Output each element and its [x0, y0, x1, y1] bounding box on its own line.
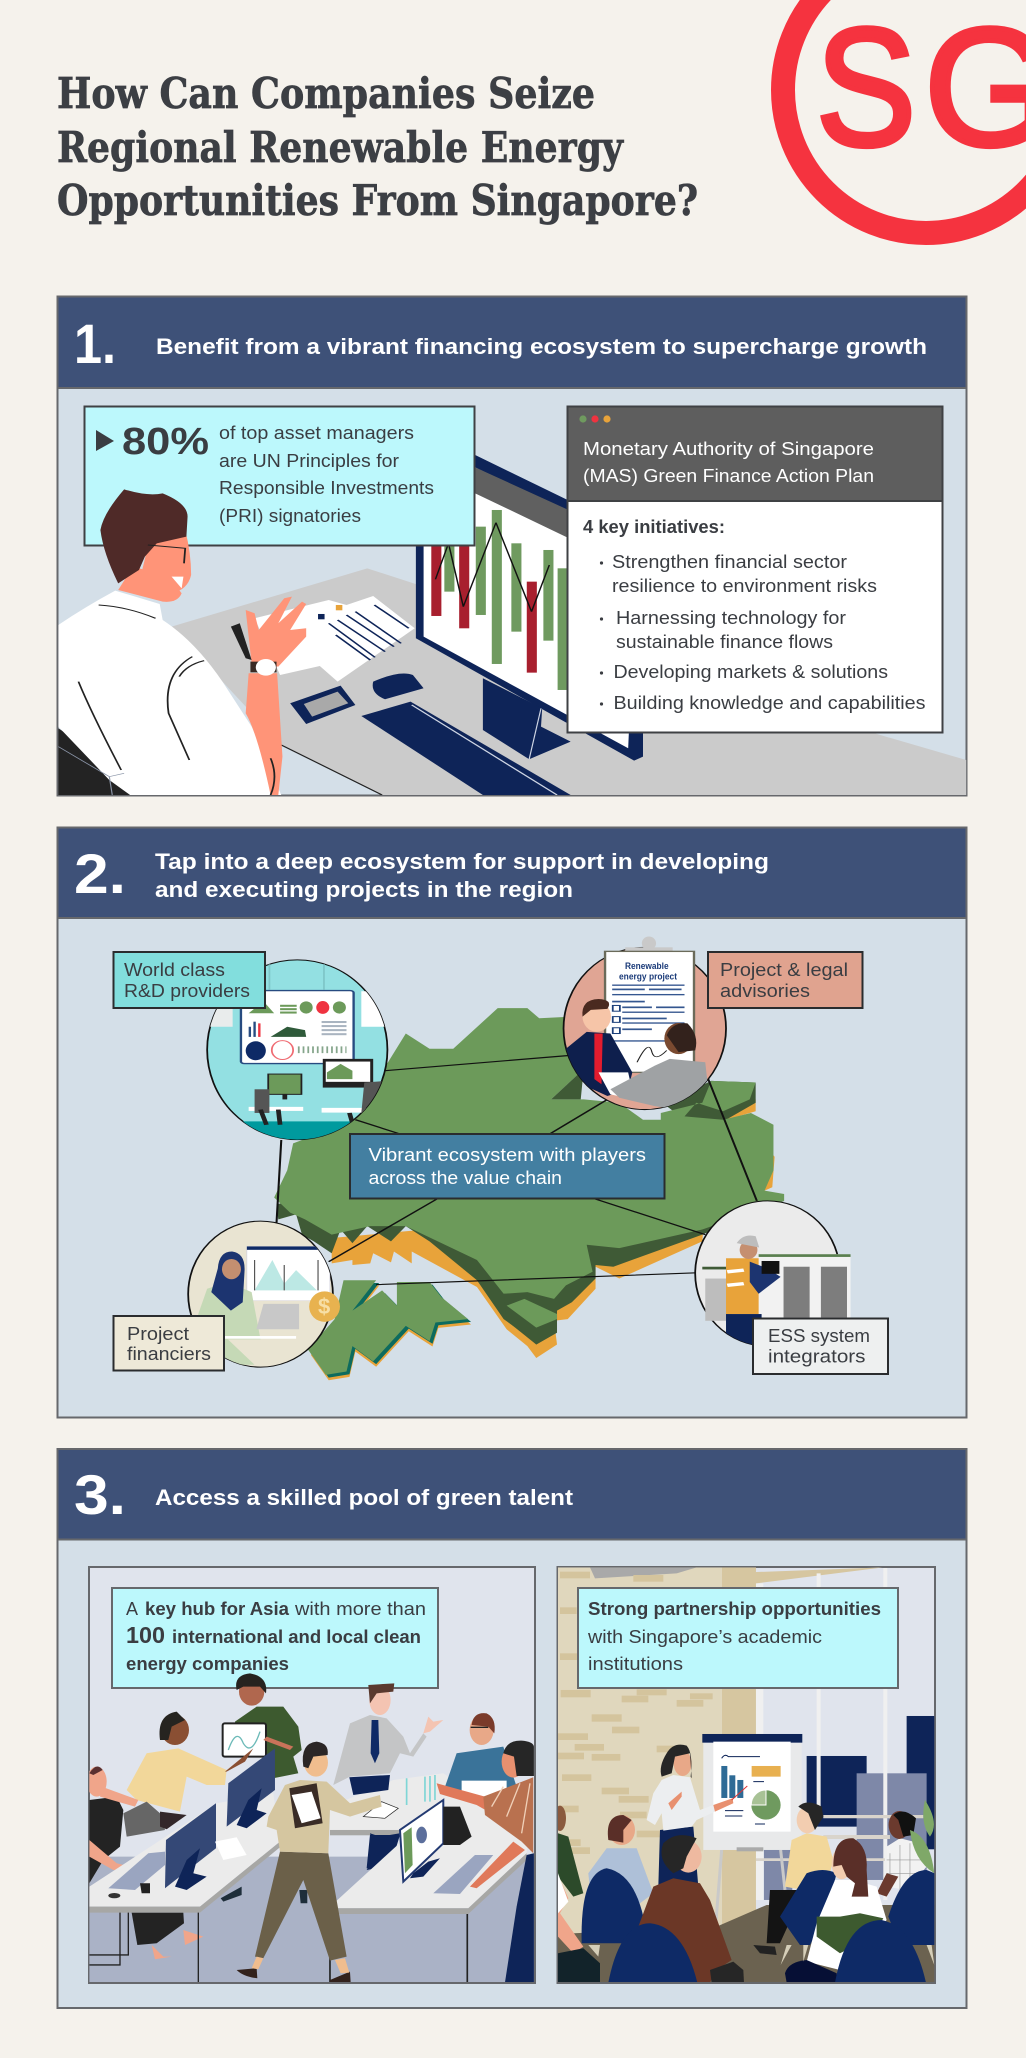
presenter [658, 1827, 698, 1887]
ponytail woman [807, 1880, 887, 1970]
label: ESS system integrators: ESS system [768, 1326, 870, 1346]
callout: 80% of top asset managers: are UN Principles for [219, 451, 399, 471]
card: MAS Green Finance Action Plan: Monetary Authority of Singapore [583, 439, 874, 459]
illustration: desk with trading monitor [172, 455, 966, 795]
callout: 80% of top asset managers [84, 406, 474, 546]
card: MAS Green Finance Action Plan: Harnessing technology for [616, 608, 846, 628]
title: Regional Renewable Energy [57, 123, 624, 172]
card: MAS Green Finance Action Plan: sustainable finance flows [616, 632, 833, 652]
label: vibrant ecosystem callout: across the value chain [368, 1168, 562, 1188]
flip chart [716, 1850, 785, 1922]
panel 2 header [58, 828, 966, 918]
callout: key hub for Asia: energy companies [126, 1654, 289, 1674]
scene: office team [87, 1673, 534, 1983]
label: World class R&D providers [114, 952, 265, 1008]
callout: key hub for Asia: key hub for Asia [145, 1599, 290, 1619]
label: Project financiers: financiers [127, 1344, 211, 1364]
label: Project & legal advisories [708, 952, 862, 1008]
yellow shirt man [127, 1748, 227, 1812]
panel 2 header: 2. [74, 842, 126, 905]
back desk [330, 1774, 472, 1830]
label: vibrant ecosystem callout [350, 1134, 664, 1198]
panel 3 header: 3. [74, 1463, 126, 1526]
callout: 80% of top asset managers: (PRI) signatories [219, 506, 361, 526]
circle: R&D illustration [207, 960, 396, 1142]
title: How Can Companies Seize [57, 69, 595, 118]
skyline [807, 1756, 867, 1827]
scene: classroom presentation [554, 1567, 935, 1983]
label: ESS system integrators: integrators [768, 1346, 866, 1366]
map of Singapore with connections [274, 1008, 784, 1380]
card: MAS Green Finance Action Plan: resilience to environment risks [612, 576, 877, 596]
panel 1 header: Benefit from a vibrant financing ecosystem to supercharge growth [156, 334, 927, 359]
chairs front [608, 1923, 697, 1983]
circle: ESS integrator illustration [695, 1201, 851, 1348]
card: MAS Green Finance Action Plan: 4 key initiatives: [583, 517, 725, 537]
card: MAS Green Finance Action Plan: Building knowledge and capabilities [614, 693, 926, 713]
illustration: man in white shirt [58, 489, 306, 795]
callout: 80% of top asset managers: Responsible Investments [219, 478, 434, 498]
callout: key hub for Asia: with more than [294, 1599, 426, 1619]
label: Project financiers [114, 1316, 224, 1370]
card: MAS Green Finance Action Plan: Developing markets & solutions [614, 662, 888, 682]
icon: play arrow [96, 430, 114, 451]
card: MAS Green Finance Action Plan: (MAS) Green Finance Action Plan [583, 466, 874, 486]
label: World class R&D providers: World class [124, 960, 225, 980]
yellow shirt [785, 1833, 833, 1890]
callout: strong partnership opportunities: Strong partnership opportunities [588, 1599, 881, 1619]
tie man [333, 1715, 427, 1785]
circle: project and legal advisory illustration [564, 937, 726, 1110]
panel 3: green talent [58, 1449, 966, 2008]
clipboard heading: Renewable [625, 961, 669, 972]
card: MAS Green Finance Action Plan [568, 406, 942, 732]
label: World class R&D providers: R&D providers [124, 981, 250, 1001]
clipboard heading [619, 961, 678, 982]
plant [910, 1800, 934, 1873]
panel 1: financing ecosystem [58, 296, 966, 796]
label: Project financiers: Project [127, 1324, 189, 1344]
green sweater man [235, 1707, 302, 1778]
callout: 80% of top asset managers: 80% [122, 421, 209, 463]
chairs back [582, 1868, 643, 1943]
panel 2 header: Tap into a deep ecosystem for support in developing [155, 849, 769, 874]
callout: 80% of top asset managers: of top asset managers [219, 423, 414, 443]
callout: strong partnership opportunities: institutions [588, 1654, 683, 1674]
card: MAS Green Finance Action Plan: Strengthen financial sector [612, 552, 847, 572]
callout: key hub for Asia: international and local clean [172, 1627, 421, 1647]
panel 2: deep ecosystem [58, 828, 966, 1418]
blue man [445, 1746, 516, 1790]
right desk [367, 1835, 400, 1868]
seated people: back row [588, 1848, 653, 1903]
center man [255, 1852, 347, 1961]
wall and column [558, 1567, 722, 1934]
panel 3 header: Access a skilled pool of green talent [155, 1485, 574, 1510]
plaid shirt [887, 1838, 927, 1890]
label: Project & legal advisories: Project & legal [720, 960, 848, 980]
callout: strong partnership opportunities: with Singapore’s academic [587, 1627, 822, 1647]
icon: dollar coin: $ [318, 1294, 330, 1319]
clipboard heading: energy project [619, 972, 678, 982]
panel 1 header: 1. [74, 312, 116, 375]
callout: key hub for Asia: 100 [126, 1622, 165, 1648]
panel 1 header [58, 296, 966, 388]
right woman [436, 1783, 484, 1810]
callout: key hub for Asia [112, 1588, 438, 1688]
scene: classroom presentation background [558, 1567, 935, 1983]
panel 2 header: and executing projects in the region [155, 877, 573, 902]
scene background: office wall [89, 1567, 535, 1983]
label: ESS system integrators [753, 1318, 888, 1374]
left woman [89, 1797, 123, 1883]
left desk [132, 1913, 184, 1945]
title [57, 69, 698, 225]
callout: strong partnership opportunities [578, 1588, 898, 1688]
floor [558, 1905, 935, 1983]
callout: key hub for Asia: A [126, 1599, 138, 1619]
label: vibrant ecosystem callout: Vibrant ecosystem with players [368, 1145, 646, 1165]
brown jacket [638, 1878, 732, 1983]
title: Opportunities From Singapore? [57, 176, 698, 225]
logo: SG in red ring [783, 0, 1026, 233]
circle: project financier illustration [188, 1221, 340, 1367]
label: Project & legal advisories: advisories [720, 981, 810, 1001]
panel 3 header [58, 1449, 966, 1540]
